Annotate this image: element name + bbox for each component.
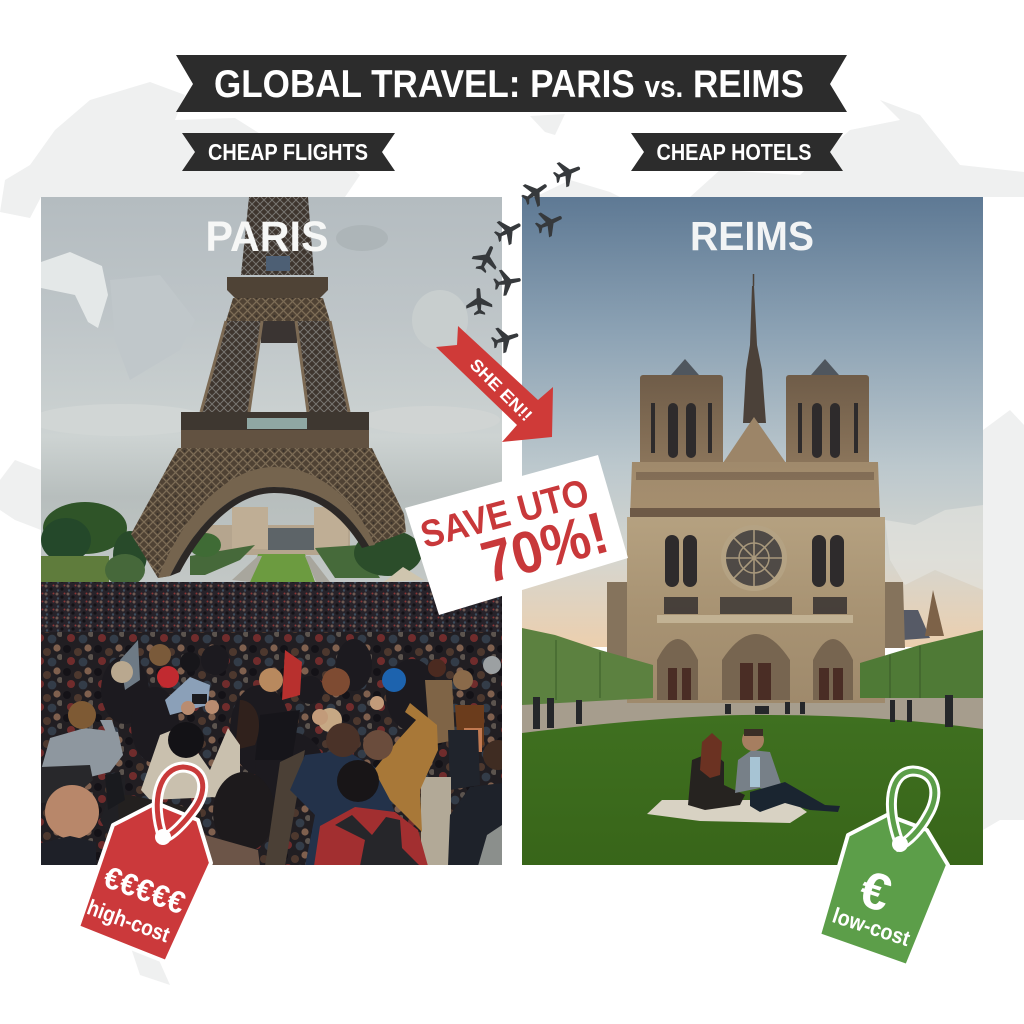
price tag: low-cost: low-cost [829, 903, 914, 951]
side chapel [903, 590, 944, 640]
heading: REIMS: REIMS [690, 213, 814, 259]
trees [41, 502, 424, 588]
banner: cheap flights [182, 133, 395, 171]
lawn [522, 715, 983, 866]
callout: save up to 70% [405, 455, 628, 615]
Reims Cathedral [607, 274, 905, 703]
Eiffel Tower [131, 197, 406, 578]
price tag: high-cost [78, 767, 211, 962]
price tag: low-cost [819, 771, 948, 966]
crowd middle band [41, 632, 502, 866]
ground behind cathedral [522, 698, 983, 733]
title banner: GLOBAL TRAVEL: PARIS vs. REIMS [214, 63, 804, 106]
price tag: low-cost: € [853, 860, 898, 924]
banner: cheap flights: CHEAP FLIGHTS [208, 139, 368, 165]
panel: Paris photo [30, 197, 513, 866]
ghost map in sky [885, 505, 983, 590]
price tag: high-cost: €€€€€ [99, 859, 190, 921]
arrow: red diagonal: SHE EN!! [466, 355, 536, 425]
callout: save up to 70%: 70%! [474, 499, 615, 596]
sky with ghost map [30, 197, 502, 597]
trees in front of cathedral [522, 628, 983, 705]
visitors on the promenade [533, 695, 953, 729]
banner: cheap hotels [631, 133, 843, 171]
callout: save up to 70%: SAVE UTO [416, 472, 593, 557]
banner: cheap hotels: CHEAP HOTELS [656, 139, 812, 165]
arrow: red diagonal [436, 326, 553, 442]
panel: Reims photo [522, 197, 983, 866]
icon: airplanes flight path [465, 156, 585, 355]
distant palace and garden [189, 507, 380, 582]
title banner [176, 55, 847, 112]
couple on picnic blanket [647, 729, 840, 823]
crowd foreground people [41, 639, 513, 866]
heading: PARIS: PARIS [206, 213, 328, 261]
crowd distant band [41, 582, 502, 632]
price tag: high-cost: high-cost [84, 894, 174, 948]
